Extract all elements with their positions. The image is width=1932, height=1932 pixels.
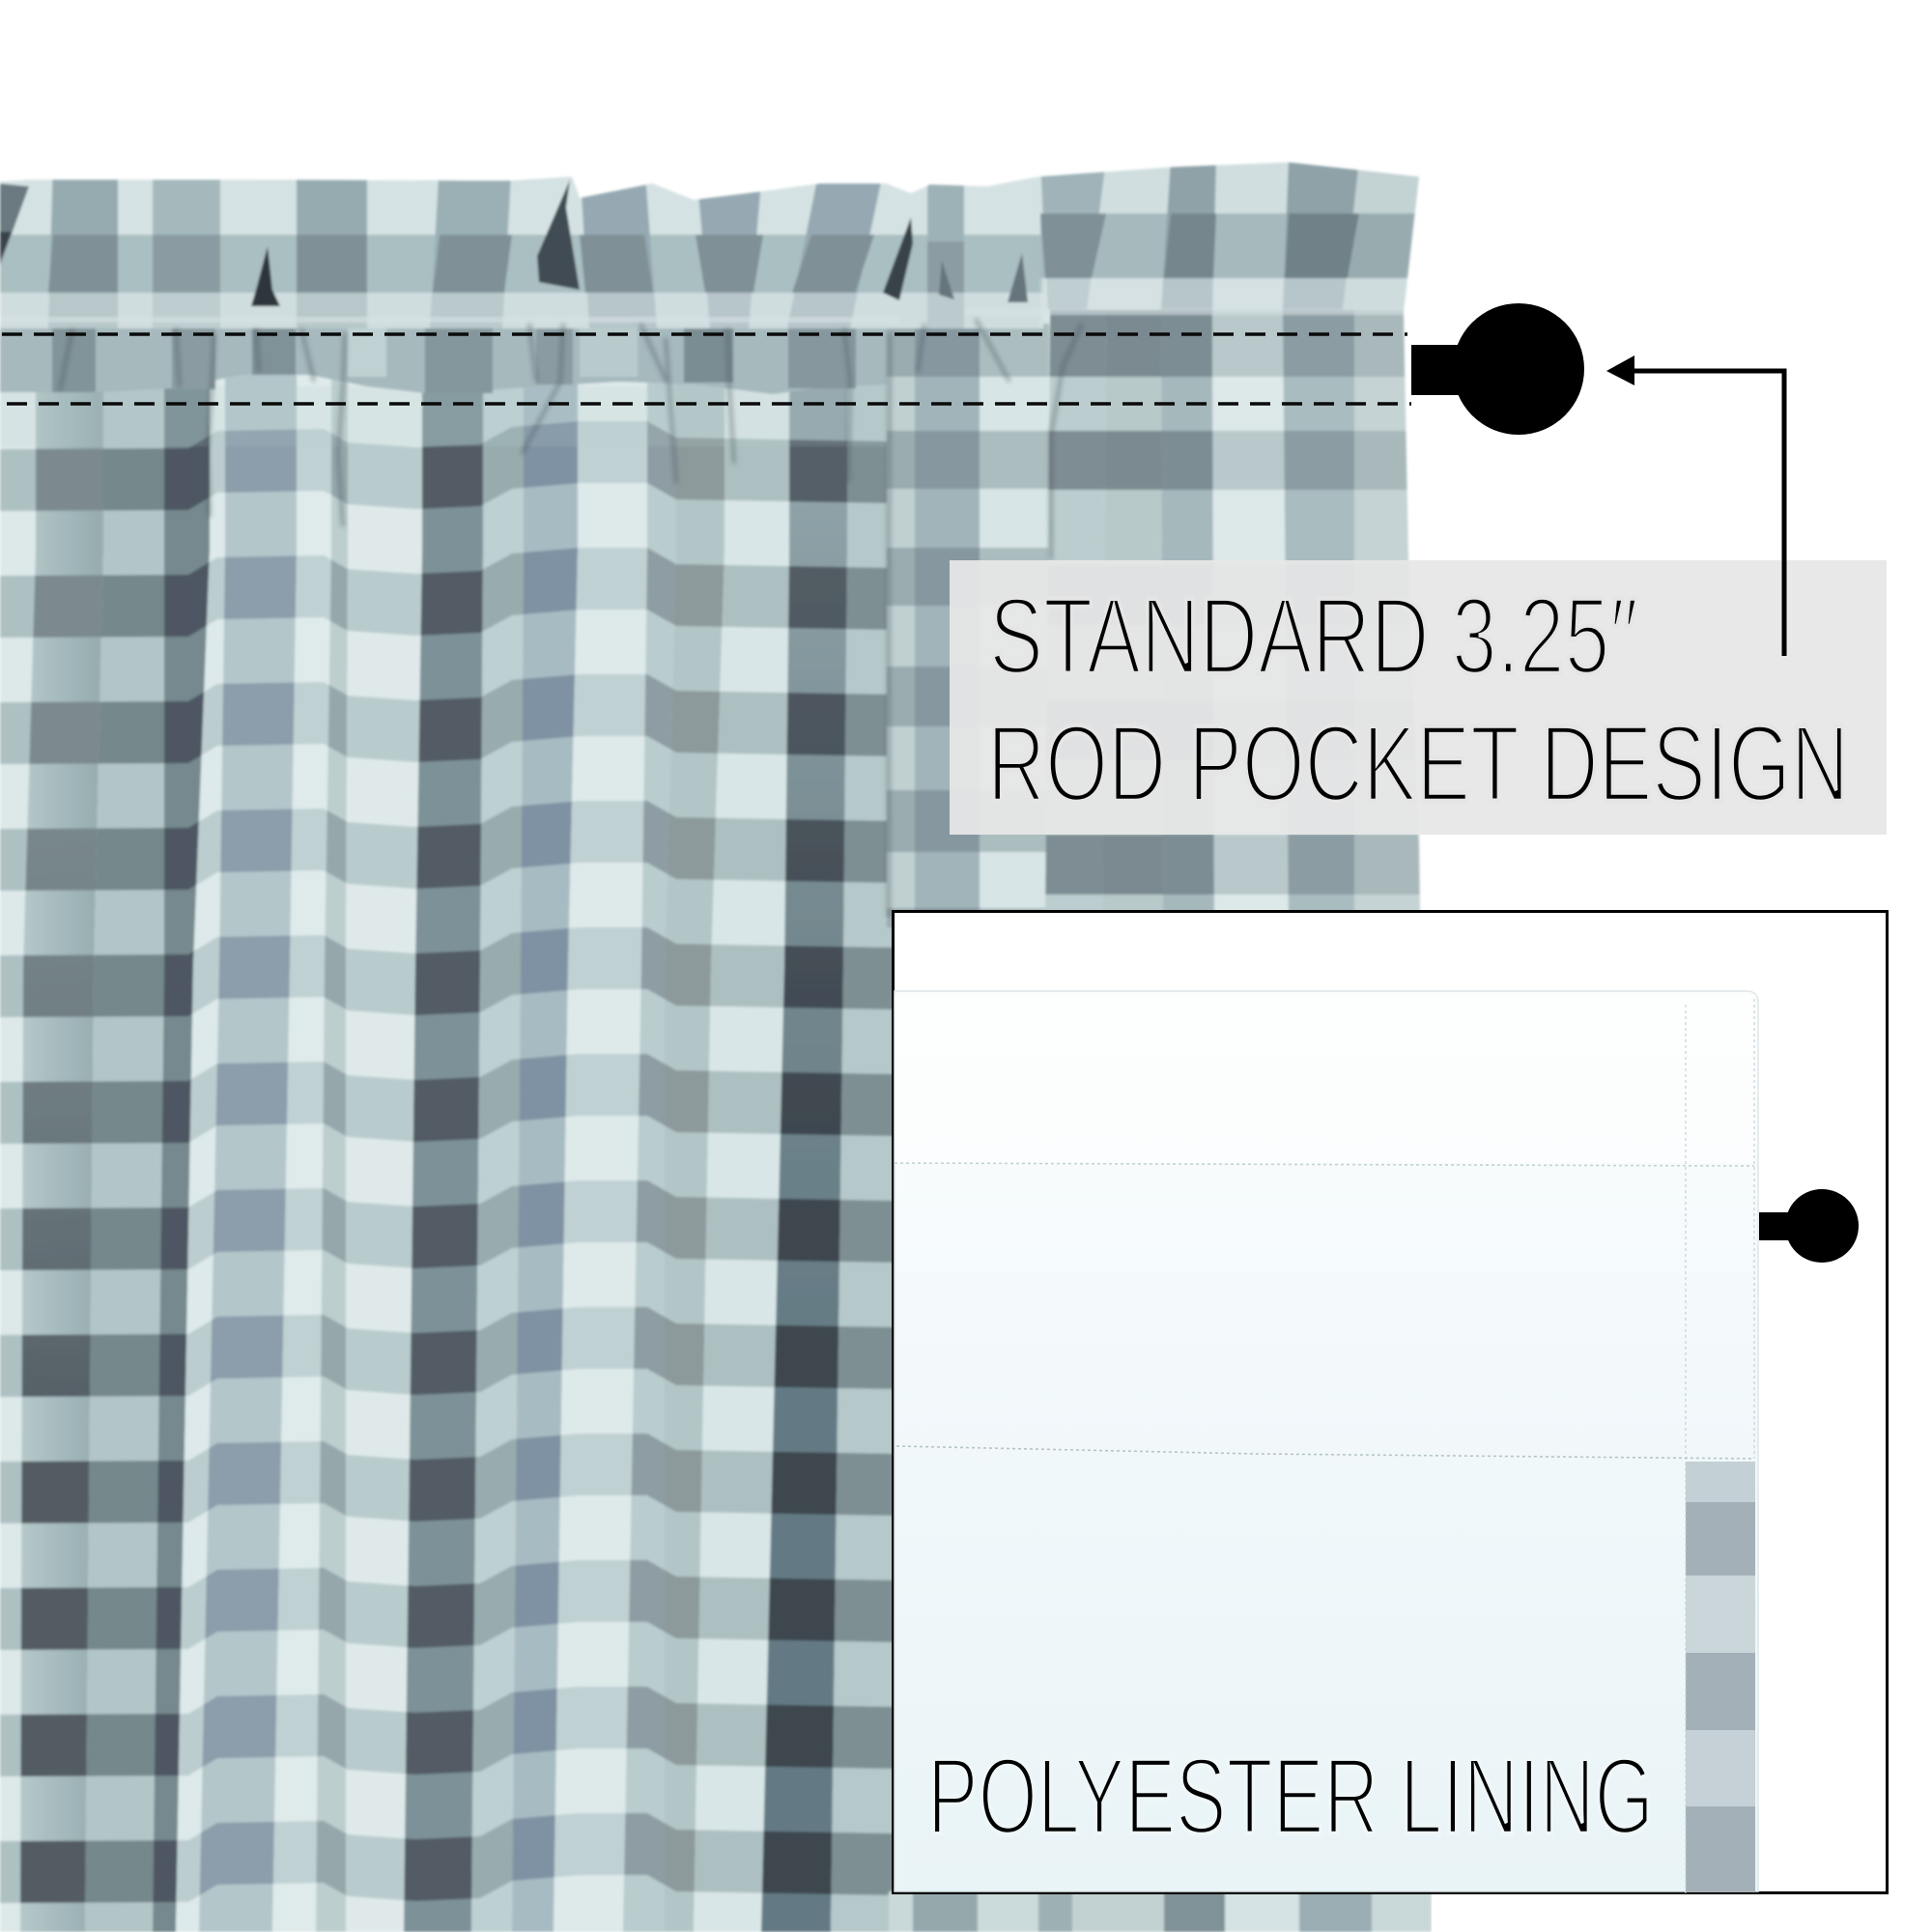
right panel xyxy=(1045,309,1430,927)
header ruffle xyxy=(0,159,1430,328)
lining label: POLYESTER LINING xyxy=(927,1736,1654,1857)
fold wedges xyxy=(0,180,1028,306)
body columns xyxy=(0,373,892,1932)
stitching xyxy=(895,999,1754,1893)
icon: curtain rod xyxy=(1411,303,1584,435)
gathered stitch line xyxy=(0,312,1410,320)
callout text line 1: STANDARD 3.25″ xyxy=(989,576,1638,696)
rod pocket band xyxy=(0,328,894,394)
lining fabric xyxy=(895,991,1758,1891)
dashed rod pocket lines xyxy=(2,334,1411,404)
panel: lining detail xyxy=(893,912,1888,1893)
arrow to rod xyxy=(1606,355,1784,656)
lining top fold highlight xyxy=(895,995,1756,1163)
body horizontal bands xyxy=(0,421,892,1905)
callout: rod pocket xyxy=(950,560,1887,835)
bottom strip under lining xyxy=(889,1891,1432,1932)
rod pocket pale strip xyxy=(165,389,885,446)
pleat fold lines xyxy=(60,319,1082,918)
middle panel xyxy=(887,309,1049,927)
icon: small curtain rod xyxy=(1759,1189,1859,1263)
checked side edge xyxy=(1686,1462,1755,1891)
gingham curtain photo xyxy=(0,159,1432,1932)
